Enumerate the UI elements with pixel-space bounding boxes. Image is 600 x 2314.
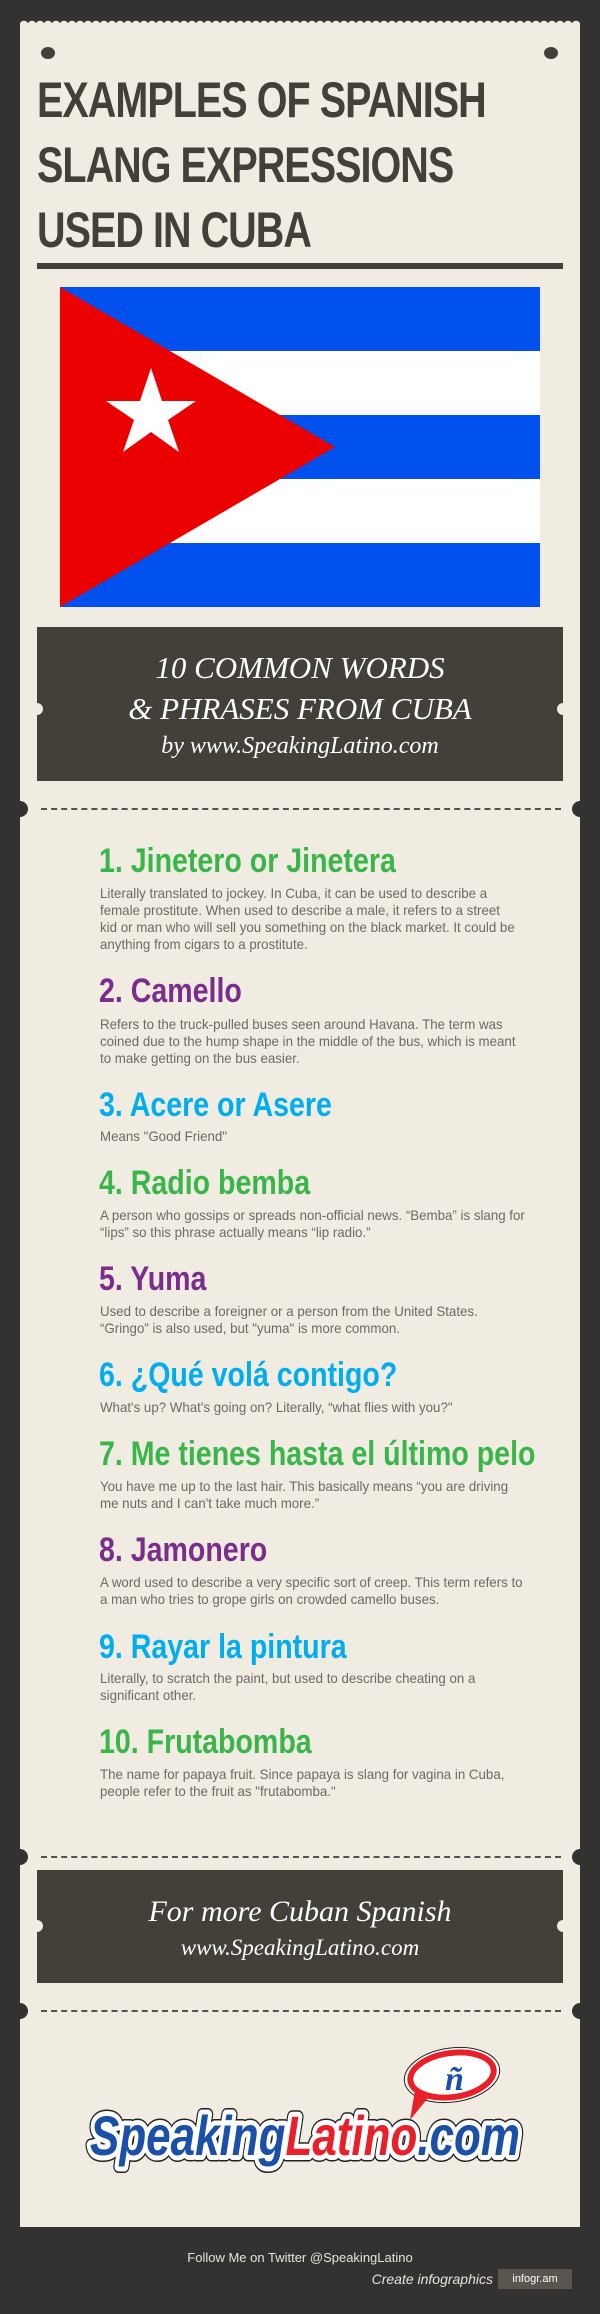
text: “lips” so this phrase actually means “lip radio.” [100,1224,371,1240]
banner: subtitle: & PHRASES FROM CUBA [128,691,472,726]
logo: SpeakingLatino.com [86,2046,524,2173]
text: What's up? What's going on? Literally, “what flies with you?" [100,1399,453,1415]
title: EXAMPLES OF SPANISH [37,72,486,128]
text: Literally, to scratch the paint, but used to describe cheating on a [100,1670,475,1686]
text: Means "Good Friend" [100,1128,227,1144]
logo: SpeakingLatino.com: ñ [445,2061,464,2098]
text: anything from cigars to a prostitute. [100,936,308,952]
text: A word used to describe a very specific sort of creep. This term refers to [100,1574,523,1590]
title: SLANG EXPRESSIONS [37,137,453,193]
footer: infogram credit: Create infographics [372,2271,493,2287]
footer: twitter: Follow Me on Twitter @SpeakingLatino [187,2250,413,2265]
text: female prostitute. When used to describe a male, it refers to a street [100,902,500,918]
text: a man who tries to grope girls on crowded camello buses. [100,1591,439,1607]
text: coined due to the hump shape in the middle of the bus, which is meant [100,1033,516,1049]
banner: subtitle: 10 COMMON WORDS [155,650,445,685]
icon: pin dots [41,47,558,59]
text: people refer to the fruit as "frutabomba." [100,1783,336,1799]
item 3: 3. Acere or Asere [99,1086,332,1124]
item 7: 7. Me tienes hasta el último pelo [99,1435,535,1473]
item 8: 8. Jamonero [99,1531,267,1569]
text: significant other. [100,1687,196,1703]
text: Used to describe a foreigner or a person from the United States. [100,1303,478,1319]
text: to make getting on the bus easier. [100,1050,300,1066]
item 4: 4. Radio bemba [99,1164,310,1202]
banner: more info [37,1870,563,1983]
item 6: 6. ¿Qué volá contigo? [99,1356,397,1394]
flag of Cuba [60,287,540,607]
banner: subtitle [37,627,563,781]
banner: more info: www.SpeakingLatino.com [181,1935,419,1960]
text: Refers to the truck-pulled buses seen around Havana. The term was [100,1016,503,1032]
text: You have me up to the last hair. This basically means “you are driving [100,1478,508,1494]
text: A person who gossips or spreads non-official news. “Bemba” is slang for [100,1207,525,1223]
footer: infogram credit [372,2269,572,2289]
item 2: 2. Camello [99,972,242,1010]
text: “Gringo” is also used, but "yuma" is more common. [100,1320,400,1336]
banner: subtitle: by www.SpeakingLatino.com [161,733,439,759]
item 10: 10. Frutabomba [99,1723,312,1761]
text: kid or man who will sell you something on the black market. It could be [100,919,515,935]
item 1: 1. Jinetero or Jinetera [99,842,396,880]
title: USED IN CUBA [37,202,311,258]
footer: infogram credit: infogr.am [512,2273,558,2285]
item 5: 5. Yuma [99,1260,206,1298]
item 9: 9. Rayar la pintura [99,1628,347,1666]
text: The name for papaya fruit. Since papaya is slang for vagina in Cuba, [100,1766,504,1782]
title [37,72,486,258]
text: Literally translated to jockey. In Cuba, it can be used to describe a [100,885,487,901]
text: me nuts and I can't take much more.” [100,1495,319,1511]
banner: more info: For more Cuban Spanish [148,1895,452,1928]
